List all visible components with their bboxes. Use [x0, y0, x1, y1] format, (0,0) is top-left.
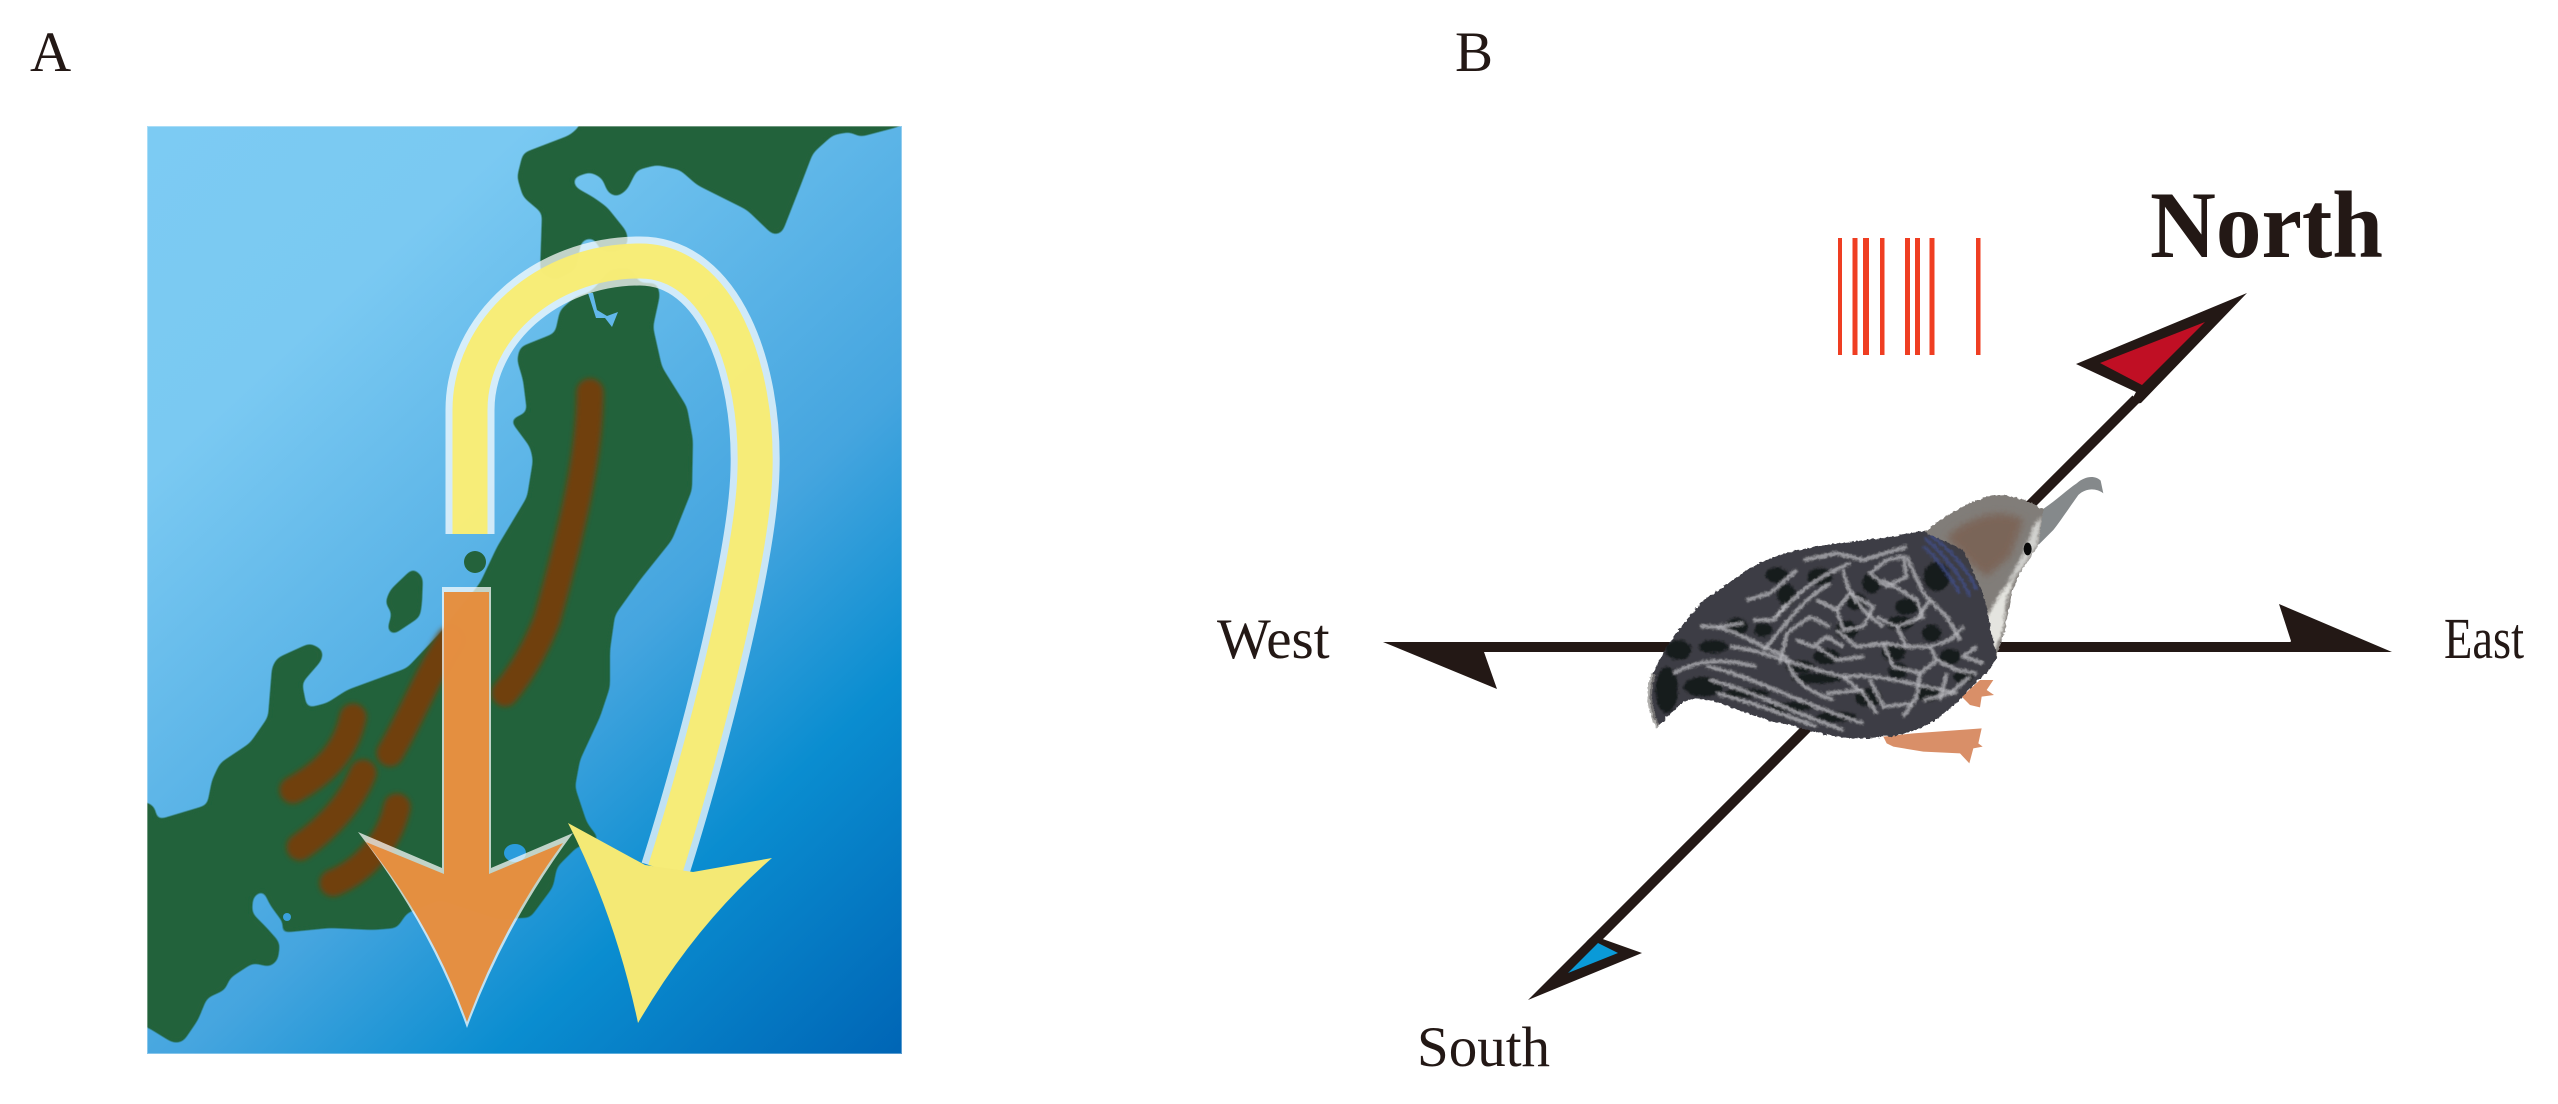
south arrow head — [1528, 937, 1642, 1000]
land masses — [120, 110, 930, 1043]
bird tail haze — [1650, 673, 1658, 727]
map edge — [147, 126, 902, 1054]
label East: East — [2444, 606, 2524, 671]
north arrow head — [2076, 293, 2247, 405]
orange arrow outline — [358, 587, 573, 1028]
bird pale feather edges — [1673, 547, 1983, 730]
yellow arrow outline — [470, 261, 755, 870]
map sea background — [147, 126, 902, 1054]
orange arrow fill — [366, 592, 563, 1022]
bird dark feather centres — [1655, 562, 1973, 722]
yellow curved arrow — [470, 261, 772, 1023]
west arrow head — [1383, 642, 1497, 689]
bays — [588, 293, 618, 327]
bird body plumage — [1649, 531, 1998, 740]
panel label A: A — [30, 21, 71, 84]
bird beak — [2038, 477, 2103, 545]
bird brown cheek — [1947, 514, 2023, 577]
red tally bars — [1838, 238, 1980, 355]
label West: West — [1217, 608, 1330, 671]
bird eye — [2024, 543, 2032, 555]
bird pale face — [2007, 517, 2042, 583]
label North: North — [2150, 172, 2383, 278]
east arrow head — [2279, 604, 2392, 652]
label South: South — [1417, 1016, 1550, 1079]
panel A: map of Japan with migration arrows — [120, 110, 930, 1054]
yellow arrow head — [568, 823, 772, 1023]
panel B: orientation diagram — [1217, 172, 2524, 1079]
bird feet — [1883, 680, 1994, 763]
bird white throat — [1987, 576, 2018, 650]
yellow arrow shaft — [470, 261, 755, 870]
bird — [1640, 477, 2103, 763]
bird head — [1924, 494, 2044, 658]
west-east axis line — [1425, 642, 2300, 652]
panel label B: B — [1455, 21, 1493, 84]
bird neck blue streaks — [1923, 535, 1977, 597]
orange straight arrow — [358, 587, 573, 1028]
north-south axis line — [1590, 399, 2136, 945]
mountain ranges — [293, 392, 590, 883]
